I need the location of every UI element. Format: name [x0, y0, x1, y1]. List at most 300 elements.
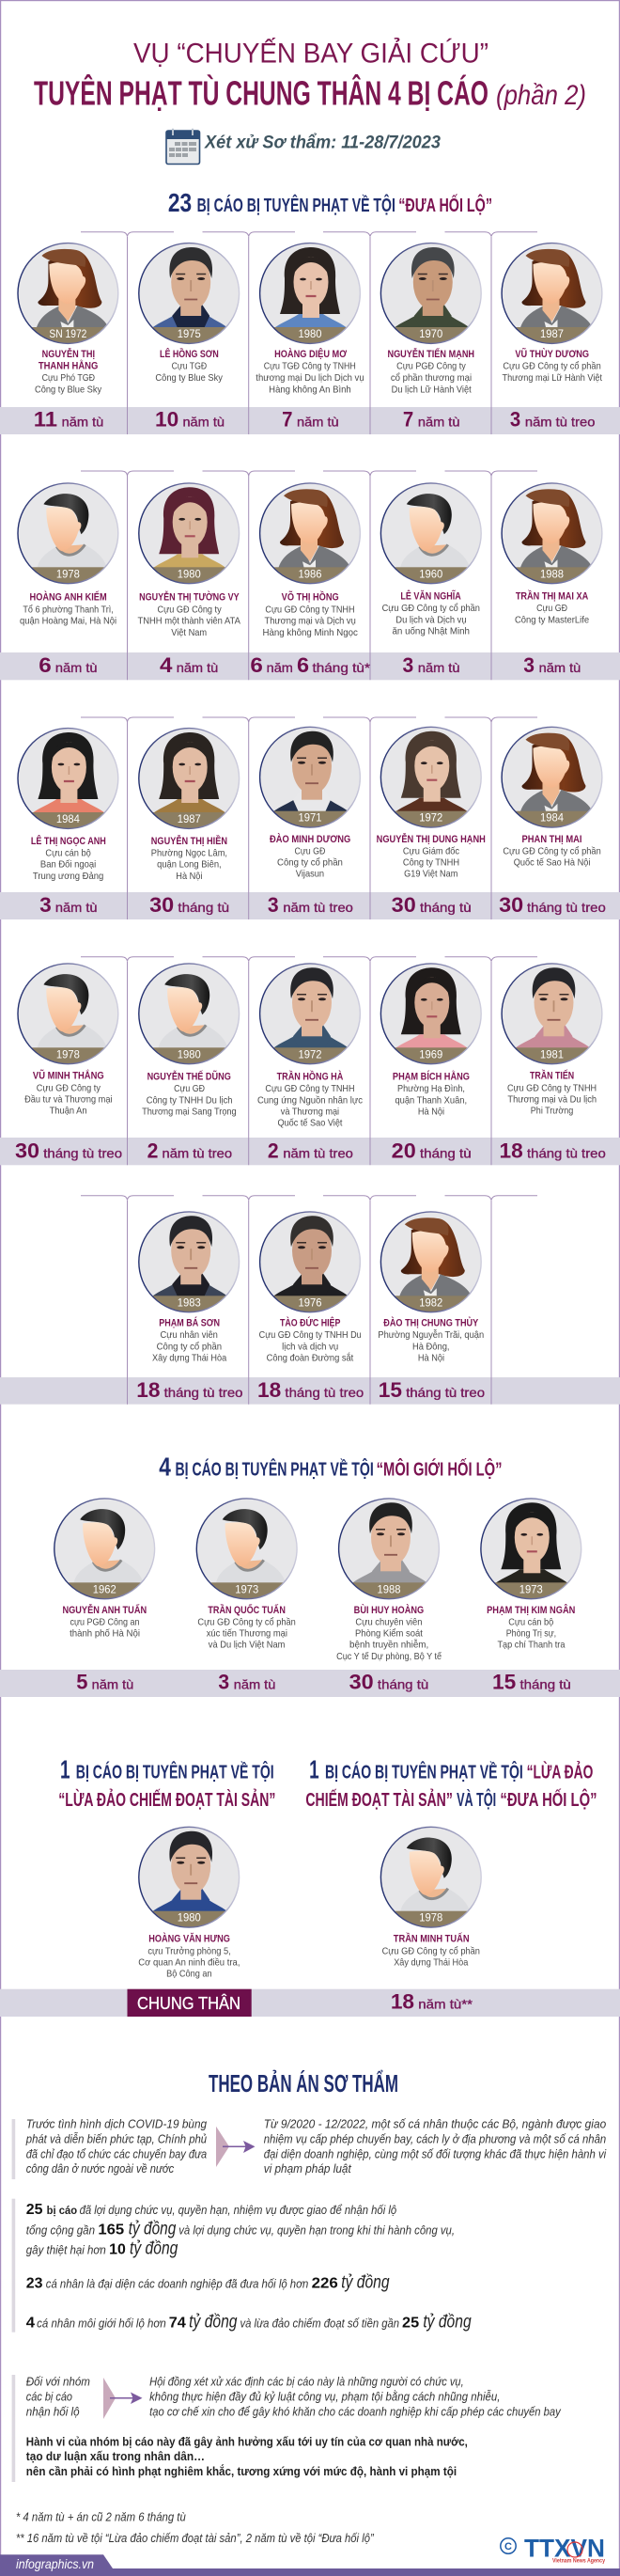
- card: Vũ Minh Thắng: Đầu tư và Thương mại: [24, 1094, 113, 1105]
- card: Vũ Minh Thắng: tháng tù treo: [43, 1147, 122, 1162]
- card: Bùi Huy Hoàng: 1988: [378, 1582, 401, 1595]
- card: Phạm Bích Hằng: quận Thanh Xuân,: [395, 1094, 467, 1106]
- text block: 25 defendants: và lợi dụng chức vụ, quyền hạn trong khi thi hành công vụ,: [178, 2224, 455, 2238]
- footer bar: infographics.vn: [16, 2556, 94, 2571]
- text block: 25 defendants: tỷ đồng: [130, 2239, 178, 2259]
- text block: 4 brokers: tỷ đồng: [189, 2313, 238, 2333]
- card: Nguyễn Thị Hiền: quận Long Biên,: [157, 859, 222, 870]
- sentence: life imprisonment: [128, 1989, 252, 2017]
- card: Phạm Bá Sơn: Xây dựng Thái Hòa: [152, 1352, 227, 1363]
- text block: 25 defendants: tổng cộng gần: [26, 2224, 95, 2238]
- card: Lê Văn Nghĩa: LÊ VĂN NGHĨA: [400, 589, 461, 602]
- card: Đào Thị Chung Thủy: 15: [379, 1378, 402, 1402]
- heading: 1 defendant, fraud: “LỪA ĐẢO CHIẾM ĐOẠT TÀI SẢN”: [58, 1789, 275, 1811]
- card: Nguyễn Thế Dũng: Thương mại Sang Trọng: [142, 1106, 237, 1117]
- card: Hoàng Diệu Mơ: thương mại Du lịch Dịch vụ: [256, 372, 364, 384]
- card: Phạm Bá Sơn: Cựu nhân viên: [160, 1329, 218, 1341]
- card: Phạm Thị Kim Ngân: 1973: [519, 1582, 543, 1595]
- card: Vũ Minh Thắng: [15, 963, 122, 1163]
- panel: row 2: [0, 471, 620, 680]
- subtitle: trial dates: Xét xử Sơ thẩm: 11-28/7/2023: [204, 133, 441, 152]
- card: Nguyễn Thị Tường Vy: [137, 482, 241, 677]
- card: Võ Thị Hồng: tháng tù*: [312, 661, 371, 676]
- card: Đào Thị Chung Thủy: Hà Nội: [418, 1352, 444, 1363]
- text block: pandemic background: đã chỉ đạo tổ chức các chuyến bay đưa: [26, 2148, 207, 2161]
- logo: TTXVN: TTXVN: [524, 2534, 605, 2562]
- card: Nguyễn Tiến Mạnh: NGUYỄN TIẾN MẠNH: [387, 346, 474, 360]
- card: Lê Văn Nghĩa: Du lịch và Dịch vụ: [395, 614, 467, 625]
- card: Bùi Huy Hoàng: BÙI HUY HOÀNG: [354, 1602, 424, 1616]
- heading: 1 defendant, fraud: BỊ CÁO BỊ TUYÊN PHẠT VỀ TỘI: [76, 1761, 274, 1783]
- title: (phần 2): [496, 80, 586, 111]
- card: Trần Quốc Tuấn: và Du lịch Việt Nam: [209, 1640, 285, 1650]
- panel: row 6: [0, 1498, 620, 1697]
- text block: 25 defendants: 165: [98, 2221, 125, 2238]
- card: Hoàng Anh Kiếm: năm tù: [55, 661, 98, 676]
- card: Nguyễn Tiến Mạnh: 7: [403, 408, 413, 432]
- heading: 1 defendant, fraud and bribery: CHIẾM ĐOẠT TÀI SẢN”: [305, 1790, 453, 1811]
- card: Trần Hồng Hà: 1972: [299, 1047, 322, 1060]
- card: Trần Thị Mai Xa: Công ty MasterLife: [515, 614, 589, 625]
- card: Lê Hồng Sơn: 1975: [178, 327, 201, 340]
- card: Nguyễn Thị Dung Hạnh: NGUYỄN THỊ DUNG HẠNH: [377, 831, 486, 845]
- card: Nguyễn Thị Thanh Hằng: NGUYỄN THỊ: [42, 346, 95, 360]
- card: Vũ Thùy Dương: năm tù treo: [525, 416, 595, 430]
- text block: violations: Từ 9/2020 - 12/2022, một số cá nhân thuộc các Bộ, ngành được giao: [264, 2118, 607, 2131]
- card: Nguyễn Tiến Mạnh: Du lịch Lữ Hành Việt: [392, 384, 473, 395]
- card: Nguyễn Thị Dung Hạnh: 1972: [419, 811, 443, 825]
- card: Hoàng Văn Hưng: cựu Trưởng phòng 5,: [147, 1945, 231, 1956]
- title: [34, 38, 586, 113]
- card: Nguyễn Thị Dung Hạnh: Công ty TNHH: [403, 856, 459, 868]
- card: Trần Minh Tuấn: [380, 1827, 482, 2014]
- card: Trần Thị Mai Xa: TRẦN THỊ MAI XA: [516, 589, 588, 602]
- card: Lê Thị Ngọc Anh: Ban Đối ngoại: [40, 859, 97, 870]
- heading: 4 defendants: BỊ CÁO BỊ TUYÊN PHẠT VỀ TỘI: [175, 1458, 374, 1481]
- card: Nguyễn Thị Dung Hạnh: G19 Việt Nam: [404, 869, 457, 879]
- card: Nguyễn Thế Dũng: 1980: [178, 1047, 201, 1060]
- text block: bribe-taking group: nhận hối lộ: [26, 2406, 80, 2419]
- card: Đào Thị Chung Thủy: ĐÀO THỊ CHUNG THỦY: [383, 1315, 479, 1328]
- card: Nguyễn Thị Thanh Hằng: Công ty Blue Sky: [35, 384, 101, 395]
- heading: theo bản án sơ thẩm: THEO BẢN ÁN SƠ THẨM: [209, 2069, 398, 2097]
- card: Lê Thị Ngọc Anh: 3: [39, 893, 52, 917]
- card: Nguyễn Thị Tường Vy: TNHH một thành viên ATA: [137, 616, 241, 626]
- arrow: [216, 2127, 256, 2167]
- panel: context: [12, 2118, 607, 2179]
- card: Võ Thị Hồng: 6: [297, 653, 309, 677]
- card: Đào Minh Dương: 3: [268, 893, 279, 917]
- card: Trần Tiến: TRẦN TIẾN: [530, 1069, 574, 1081]
- heading: 1 defendant, fraud and bribery: BỊ CÁO BỊ TUYÊN PHẠT VỀ TỘI: [325, 1761, 523, 1783]
- card: Trần Hồng Hà: [257, 963, 363, 1163]
- card: Nguyễn Thị Tường Vy: Việt Nam: [171, 627, 207, 638]
- card: Hoàng Diệu Mơ: Cựu TGĐ Công ty TNHH: [264, 360, 356, 371]
- heading: 1 defendant, fraud: 1: [60, 1755, 70, 1784]
- card: Phan Thị Mai: tháng tù treo: [527, 901, 606, 916]
- card: Trần Minh Tuấn: TRẦN MINH TUẤN: [394, 1932, 470, 1944]
- card: Lê Văn Nghĩa: 3: [402, 653, 413, 677]
- card: Phan Thị Mai: PHAN THỊ MAI: [522, 834, 582, 845]
- card: Đào Minh Dương: Công ty cổ phần: [277, 856, 343, 868]
- card: Trần Minh Tuấn: năm tù**: [418, 1998, 473, 2013]
- card: Phạm Thị Kim Ngân: 15: [492, 1671, 516, 1694]
- card: Bùi Huy Hoàng: tháng tù: [378, 1678, 428, 1693]
- card: Hoàng Anh Kiếm: quận Hoàng Mai, Hà Nội: [20, 616, 117, 626]
- text block: conclusion: Hành vi của nhóm bị cáo này đã gây ảnh hưởng xấu tới uy tín của cơ quan nhà nước,: [26, 2436, 468, 2450]
- panel: row 4: [0, 957, 620, 1165]
- card: Nguyễn Thị Hiền: Hà Nội: [176, 871, 203, 882]
- card: Nguyễn Tiến Mạnh: 1970: [419, 327, 443, 340]
- heading: 23 defendants: “ĐƯA HỐI LỘ”: [398, 195, 492, 216]
- card: Nguyễn Tiến Mạnh: cổ phần thương mại: [391, 372, 472, 384]
- card: Trần Quốc Tuấn: [196, 1498, 298, 1694]
- card: Nguyễn Thị Thanh Hằng: 11: [34, 408, 57, 432]
- card: Phạm Bích Hằng: 20: [392, 1139, 416, 1163]
- text block: pandemic background: [25, 2118, 208, 2176]
- arrow: [103, 2378, 143, 2419]
- card: Nguyễn Anh Tuấn: NGUYỄN ANH TUẤN: [62, 1602, 147, 1616]
- heading: 23 defendants: 23: [168, 188, 192, 218]
- card: Trần Minh Tuấn: 1978: [419, 1911, 443, 1924]
- card: Lê Thị Ngọc Anh: năm tù: [55, 901, 98, 916]
- card: Vũ Minh Thắng: 1978: [56, 1047, 80, 1060]
- card: Phan Thị Mai: 30: [499, 893, 523, 917]
- card: Nguyễn Thị Thanh Hằng: THANH HẰNG: [39, 359, 98, 371]
- card: Nguyễn Thế Dũng: [138, 963, 240, 1163]
- text block: violations: nhiệm vụ cấp phép chuyến bay, cách ly ở địa phương và một số cá nhân: [264, 2133, 606, 2146]
- card: Đào Minh Dương: Vijasun: [296, 869, 324, 879]
- card: Tào Đức Hiệp: 18: [257, 1378, 281, 1402]
- card: Hoàng Diệu Mơ: năm tù: [297, 416, 339, 430]
- card: Đào Minh Dương: [259, 727, 361, 917]
- heading: 1 defendant, fraud and bribery: “LỪA ĐẢO: [527, 1761, 593, 1783]
- card: Đào Thị Chung Thủy: Phường Nguyễn Trãi, quận: [378, 1329, 484, 1341]
- card: Hoàng Diệu Mơ: Hàng không An Bình: [269, 384, 351, 395]
- card: Tào Đức Hiệp: Công đoàn Đường sắt: [267, 1352, 354, 1363]
- card: Hoàng Văn Hưng: HOÀNG VĂN HƯNG: [148, 1932, 230, 1944]
- card: Nguyễn Thị Dung Hạnh: Cựu Giám đốc: [403, 845, 459, 856]
- heading: 4 defendants: “MÔI GIỚI HỐI LỘ”: [377, 1458, 503, 1481]
- card: Lê Hồng Sơn: năm tù: [182, 416, 225, 430]
- card: Tào Đức Hiệp: 1976: [299, 1296, 322, 1309]
- card: Trần Hồng Hà: năm tù treo: [283, 1147, 353, 1162]
- text block: 23 individuals: tỷ đồng: [341, 2273, 390, 2293]
- text block: 23 individuals: [26, 2273, 390, 2293]
- card: Nguyễn Tiến Mạnh: [380, 243, 482, 432]
- card: Trần Thị Mai Xa: 3: [523, 653, 535, 677]
- card: Bùi Huy Hoàng: Phòng Kiểm soát: [355, 1627, 424, 1639]
- card: Tào Đức Hiệp: Cựu GĐ Công ty TNHH Du: [259, 1329, 362, 1341]
- card: Võ Thị Hồng: 6: [250, 653, 263, 677]
- card: Phạm Bích Hằng: tháng tù: [420, 1147, 472, 1162]
- card: Bùi Huy Hoàng: 30: [349, 1671, 374, 1694]
- card: Nguyễn Thị Hiền: Phường Ngọc Lâm,: [151, 847, 227, 858]
- card: Vũ Minh Thắng: VŨ MINH THẮNG: [33, 1069, 104, 1081]
- card: Lê Hồng Sơn: 10: [155, 408, 178, 432]
- card: Phạm Thị Kim Ngân: tháng tù: [519, 1678, 571, 1693]
- text block: conclusion: nên cần phải có hình phạt nghiêm khắc, tương xứng với mức độ, hành vi phạm tội: [26, 2464, 457, 2479]
- card: Trần Tiến: tháng tù treo: [527, 1147, 606, 1162]
- heading: 1 defendant, fraud and bribery: VÀ TỘI: [457, 1789, 496, 1811]
- text block: violations: [264, 2118, 607, 2176]
- card: Nguyễn Anh Tuấn: thành phố Hà Nội: [70, 1627, 140, 1639]
- card: Nguyễn Thị Hiền: 30: [149, 893, 174, 917]
- logo: TTXVN: Vietnam News Agency: [552, 2557, 605, 2565]
- text block: 4 brokers: cá nhân môi giới hối lộ hơn: [37, 2317, 166, 2332]
- card: Trần Minh Tuấn: Xây dựng Thái Hòa: [394, 1956, 469, 1968]
- card: Phan Thị Mai: [499, 727, 606, 917]
- card: Nguyễn Thị Hiền: tháng tù: [178, 901, 229, 916]
- card: Phạm Bích Hằng: Phường Hạ Đình,: [397, 1083, 465, 1094]
- card: Phạm Bá Sơn: tháng tù treo: [164, 1386, 242, 1401]
- card: Hoàng Văn Hưng: Bộ Công an: [166, 1969, 212, 1979]
- card: Trần Hồng Hà: Cung ứng Nguồn nhân lực: [257, 1094, 363, 1106]
- footnotes: * 4 năm tù + án cũ 2 năm 6 tháng tù: [16, 2511, 187, 2525]
- card: Nguyễn Anh Tuấn: cựu PGĐ Công an: [70, 1616, 140, 1627]
- card: Nguyễn Anh Tuấn: 1962: [93, 1582, 116, 1595]
- card: Trần Quốc Tuấn: xúc tiến Thương mại: [207, 1627, 287, 1639]
- text block: 25 defendants: 10: [109, 2240, 126, 2257]
- card: Lê Hồng Sơn: [138, 243, 240, 432]
- card: Lê Văn Nghĩa: 1960: [419, 567, 443, 580]
- panel: row 7: [0, 1827, 620, 2017]
- card: Lê Văn Nghĩa: năm tù: [418, 661, 460, 676]
- heading: 23 defendants: [168, 188, 492, 218]
- card: Nguyễn Thị Tường Vy: năm tù: [177, 661, 218, 676]
- card: Bùi Huy Hoàng: [336, 1498, 442, 1694]
- text block: court findings: Hội đồng xét xử xác định các bị cáo này là những người có chức vụ,: [149, 2376, 464, 2389]
- card: Phạm Thị Kim Ngân: PHẠM THỊ KIM NGÂN: [487, 1602, 576, 1616]
- card: Phạm Bá Sơn: Công ty cổ phần: [157, 1341, 222, 1352]
- card: Hoàng Anh Kiếm: 1978: [56, 567, 80, 580]
- card: Phan Thị Mai: Quốc tế Sao Hà Nội: [514, 856, 591, 868]
- card: Nguyễn Thị Hiền: [138, 728, 240, 917]
- panel: figures: [12, 2199, 472, 2333]
- heading: 4 defendants: [159, 1453, 503, 1482]
- card: Võ Thị Hồng: [250, 482, 371, 677]
- card: Vũ Thùy Dương: Cựu GĐ Công ty cổ phần: [503, 360, 601, 371]
- sentence: life imprisonment: CHUNG THÂN: [137, 1994, 240, 2013]
- card: Trần Minh Tuấn: Cựu GĐ Công ty cổ phần: [382, 1945, 480, 1956]
- card: Phạm Bích Hằng: Hà Nội: [418, 1106, 444, 1117]
- card: Trần Quốc Tuấn: 1973: [235, 1582, 258, 1595]
- card: Đào Thị Chung Thủy: Hà Đông,: [412, 1341, 450, 1352]
- card: Đào Thị Chung Thủy: [378, 1211, 485, 1402]
- card: Vũ Thùy Dương: [502, 243, 603, 432]
- card: Nguyễn Anh Tuấn: 5: [76, 1671, 87, 1694]
- card: Đào Minh Dương: Cựu GĐ: [295, 845, 326, 856]
- card: Hoàng Anh Kiếm: HOÀNG ANH KIẾM: [30, 590, 107, 603]
- card: Võ Thị Hồng: VÕ THỊ HỒNG: [282, 589, 339, 603]
- text block: 4 brokers: 4: [26, 2314, 36, 2332]
- card: Trần Tiến: Cựu GĐ Công ty TNHH: [507, 1082, 597, 1093]
- card: Võ Thị Hồng: Cựu GĐ Công ty TNHH: [265, 604, 355, 615]
- card: Phạm Thị Kim Ngân: Phòng Trị sự,: [506, 1627, 556, 1639]
- footnotes: ** 16 năm tù về tội “Lừa đảo chiếm đoạt tài sản”, 2 năm tù về tội “Đưa hối lộ”: [16, 2533, 375, 2546]
- card: Phạm Bá Sơn: [136, 1211, 242, 1402]
- card: Lê Thị Ngọc Anh: LÊ THỊ NGỌC ANH: [31, 833, 106, 847]
- card: Tào Đức Hiệp: tháng tù treo: [285, 1386, 364, 1401]
- card: Hoàng Diệu Mơ: [256, 243, 364, 432]
- text block: pandemic background: phát và diễn biến phức tạp, Chính phủ: [25, 2133, 208, 2146]
- text block: 4 brokers: 74: [169, 2314, 186, 2332]
- card: Trần Thị Mai Xa: [502, 482, 603, 677]
- card: Lê Văn Nghĩa: Cựu GĐ Công ty cổ phần: [382, 603, 480, 614]
- card: Lê Thị Ngọc Anh: [17, 728, 118, 917]
- card: Nguyễn Thị Tường Vy: 1980: [178, 567, 201, 580]
- card: Hoàng Văn Hưng: Cơ quan An ninh điều tra,: [138, 1956, 240, 1968]
- logo: TTXVN: C: [504, 2541, 512, 2552]
- text block: 25 defendants: gây thiệt hại hơn: [26, 2244, 106, 2257]
- card: Đào Minh Dương: ĐÀO MINH DƯƠNG: [270, 833, 350, 845]
- panel: row 3: [0, 717, 620, 919]
- card: Nguyễn Thị Thanh Hằng: [17, 243, 118, 432]
- footer bar: [0, 2554, 620, 2576]
- text block: 23 individuals: 23: [26, 2274, 43, 2291]
- panel: row 5: [0, 1196, 620, 1405]
- card: Vũ Minh Thắng: Thuận An: [50, 1106, 87, 1116]
- card: Lê Hồng Sơn: Công ty Blue Sky: [155, 372, 223, 384]
- card: Nguyễn Thị Tường Vy: NGUYỄN THỊ TƯỜNG VY: [139, 589, 240, 603]
- card: Trần Thị Mai Xa: Cựu GĐ: [536, 603, 567, 614]
- text block: 4 brokers: tỷ đồng: [423, 2313, 472, 2333]
- text block: bribe-taking group: Đối với nhóm: [26, 2376, 90, 2389]
- text block: pandemic background: công dân ở nước ngoài về nước: [26, 2163, 174, 2176]
- card: Vũ Thùy Dương: Thương mại Lữ Hành Việt: [503, 372, 603, 384]
- card: Bùi Huy Hoàng: Cục Y tế Dự phòng, Bộ Y tế: [336, 1651, 442, 1662]
- card: Nguyễn Thế Dũng: Công ty TNHH Du lịch: [147, 1094, 232, 1106]
- card: Vũ Thùy Dương: 3: [510, 408, 520, 432]
- card: Nguyễn Thị Thanh Hằng: Cựu Phó TGĐ: [42, 372, 96, 384]
- card: Phạm Bích Hằng: 1969: [419, 1047, 443, 1060]
- card: Trần Hồng Hà: Cựu GĐ Công ty TNHH: [265, 1083, 355, 1094]
- card: Trần Tiến: Thương mại và Du lịch: [507, 1094, 597, 1105]
- card: Trần Hồng Hà: Quốc tế Sao Việt: [277, 1118, 344, 1128]
- text block: 25 defendants: 25: [26, 2201, 43, 2218]
- card: Phan Thị Mai: Cựu GĐ Công ty cổ phần: [503, 845, 601, 856]
- card: Phạm Bá Sơn: PHẠM BÁ SƠN: [159, 1316, 220, 1328]
- footnotes: [16, 2511, 375, 2546]
- text block: violations: đại diện doanh nghiệp, cùng một số đối tượng khác đã thực hiện hành vi: [264, 2148, 607, 2161]
- card: Đào Minh Dương: năm tù treo: [283, 901, 353, 916]
- card: Phan Thị Mai: 1984: [540, 811, 564, 825]
- card: Nguyễn Thế Dũng: NGUYỄN THẾ DŨNG: [147, 1069, 231, 1082]
- card: Đào Thị Chung Thủy: tháng tù treo: [406, 1386, 485, 1401]
- text block: 23 individuals: 226: [312, 2274, 338, 2291]
- card: Lê Thị Ngọc Anh: 1984: [56, 812, 80, 825]
- card: Võ Thị Hồng: Hàng không Minh Ngọc: [262, 627, 358, 638]
- card: Phạm Bá Sơn: 18: [136, 1378, 160, 1402]
- card: Võ Thị Hồng: năm: [267, 661, 293, 676]
- card: Phạm Thị Kim Ngân: Cựu cán bộ: [508, 1616, 553, 1627]
- text block: 23 individuals: cá nhân là đại diện các doanh nghiệp đã đưa hối lộ hơn: [46, 2278, 308, 2291]
- card: Hoàng Văn Hưng: 1980: [178, 1911, 201, 1924]
- card: Trần Quốc Tuấn: TRẦN QUỐC TUẤN: [208, 1602, 286, 1616]
- text block: 4 brokers: [26, 2313, 472, 2333]
- card: Nguyễn Anh Tuấn: năm tù: [92, 1678, 133, 1693]
- card: Phạm Thị Kim Ngân: [480, 1498, 581, 1694]
- card: Phạm Bích Hằng: [380, 963, 482, 1163]
- card: Võ Thị Hồng: 1986: [299, 567, 322, 580]
- card: Trần Thị Mai Xa: 1988: [540, 567, 564, 580]
- card: Lê Hồng Sơn: Cựu TGĐ: [172, 360, 208, 371]
- card: Đào Thị Chung Thủy: 1982: [419, 1296, 443, 1309]
- card: Phạm Thị Kim Ngân: Tạp chí Thanh tra: [497, 1640, 566, 1650]
- card: Tào Đức Hiệp: lịch và dịch vụ: [282, 1341, 338, 1352]
- heading: 4 defendants: 4: [159, 1453, 171, 1482]
- card: Nguyễn Anh Tuấn: [54, 1498, 155, 1694]
- text block: bribe-taking group: [26, 2376, 90, 2419]
- card: Nguyễn Thị Dung Hạnh: [377, 727, 486, 917]
- card: Đào Minh Dương: 1971: [299, 811, 322, 825]
- card: Trần Thị Mai Xa: năm tù: [539, 661, 581, 676]
- card: Hoàng Diệu Mơ: 7: [282, 408, 292, 432]
- card: Lê Thị Ngọc Anh: Cựu cán bộ: [45, 847, 91, 858]
- heading: 1 defendant, fraud: [58, 1755, 275, 1811]
- text block: conclusion: tạo dư luận xấu trong nhân dân…: [26, 2451, 205, 2464]
- panel: court assessment: [12, 2375, 562, 2482]
- card: Hoàng Văn Hưng: [128, 1827, 252, 2017]
- text block: court findings: [149, 2376, 562, 2419]
- card: Vũ Minh Thắng: 30: [15, 1139, 39, 1163]
- text block: 4 brokers: 25: [402, 2314, 420, 2332]
- text block: pandemic background: Trước tình hình dịch COVID-19 bùng: [26, 2118, 208, 2131]
- card: Trần Hồng Hà: và Thương mại: [281, 1106, 339, 1117]
- card: Lê Hồng Sơn: LÊ HỒNG SƠN: [160, 346, 219, 360]
- card: Tào Đức Hiệp: [257, 1211, 364, 1402]
- card: Hoàng Diệu Mơ: 1980: [299, 327, 322, 340]
- card: Phạm Bích Hằng: PHẠM BÍCH HẰNG: [393, 1070, 470, 1082]
- text block: court findings: tạo cơ chế xin cho để gây khó khăn cho các doanh nghiệp khi cấp phép các chuyến bay: [149, 2406, 562, 2419]
- card: Nguyễn Thế Dũng: 2: [147, 1139, 158, 1163]
- card: Lê Văn Nghĩa: [380, 482, 482, 677]
- card: Trần Quốc Tuấn: năm tù: [234, 1678, 275, 1693]
- card: Nguyễn Thị Thanh Hằng: SN 1972: [49, 327, 87, 340]
- card: Hoàng Anh Kiếm: 6: [39, 653, 52, 677]
- card: Trần Tiến: Phi Trường: [531, 1106, 573, 1116]
- panel: row 1: [0, 232, 620, 434]
- card: Lê Văn Nghĩa: ăn uống Nhật Minh: [393, 625, 470, 636]
- text block: 25 defendants: [26, 2201, 455, 2259]
- card: Nguyễn Thị Hiền: 1987: [178, 812, 201, 825]
- card: Trần Tiến: 1981: [540, 1047, 564, 1060]
- card: Lê Thị Ngọc Anh: Trung ương Đảng: [33, 871, 103, 882]
- card: Nguyễn Thị Hiền: NGUYỄN THỊ HIỀN: [151, 833, 227, 847]
- text block: 4 brokers: và lừa đảo chiếm đoạt số tiền gần: [240, 2317, 399, 2332]
- card: Vũ Thùy Dương: 1987: [540, 327, 564, 340]
- heading: 23 defendants: BỊ CÁO BỊ TUYÊN PHẠT VỀ TỘI: [197, 195, 395, 216]
- text block: bribe-taking group: các bị cáo: [26, 2391, 73, 2404]
- heading: 1 defendant, fraud and bribery: “ĐƯA HỐI LỘ”: [500, 1789, 597, 1811]
- card: Trần Tiến: [500, 963, 606, 1163]
- card: Nguyễn Thị Dung Hạnh: tháng tù: [420, 901, 472, 916]
- card: Hoàng Anh Kiếm: [17, 482, 118, 677]
- card: Nguyễn Tiến Mạnh: Cựu PGĐ Công ty: [396, 360, 466, 371]
- card: Trần Quốc Tuấn: Cựu GĐ Công ty cổ phần: [197, 1616, 296, 1627]
- text block: conclusion: [26, 2436, 468, 2479]
- card: Bùi Huy Hoàng: bệnh truyền nhiễm,: [349, 1640, 428, 1650]
- text block: court findings: không thực hiện đầy đủ kỷ luật công vụ, phạm tội bằng cách nhũng nhiễu,: [149, 2391, 500, 2404]
- text block: 25 defendants: bị cáo: [47, 2205, 78, 2217]
- heading: 1 defendant, fraud and bribery: 1: [309, 1755, 319, 1784]
- card: Trần Quốc Tuấn: 3: [218, 1671, 229, 1694]
- card: Tào Đức Hiệp: TÀO ĐỨC HIỆP: [280, 1315, 341, 1328]
- card: Hoàng Diệu Mơ: HOÀNG DIỆU MƠ: [274, 346, 347, 360]
- card: Nguyễn Thị Tường Vy: 4: [160, 653, 173, 677]
- card: Nguyễn Thế Dũng: năm tù treo: [163, 1147, 232, 1162]
- title: VỤ “CHUYẾN BAY GIẢI CỨU”: [133, 38, 488, 70]
